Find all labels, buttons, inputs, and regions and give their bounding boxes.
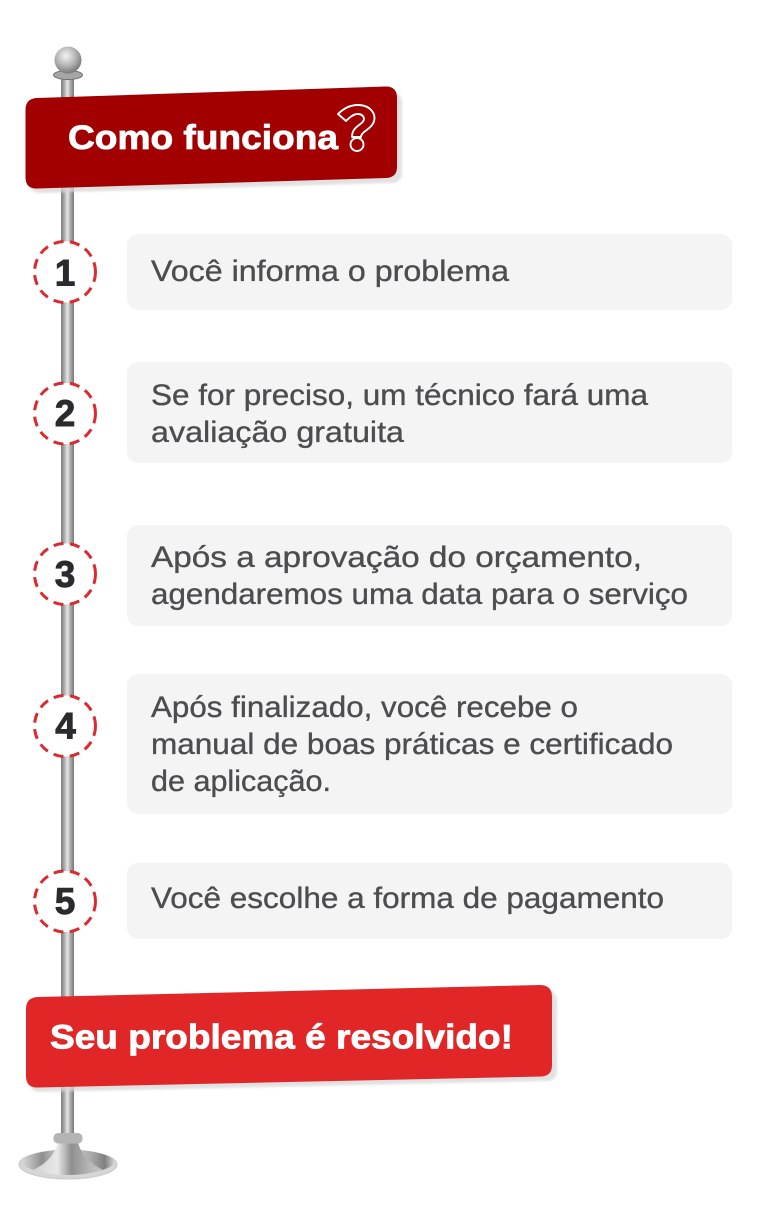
text 2: Se for preciso, um técnico fará uma — [151, 379, 648, 412]
text 4 — [151, 691, 673, 798]
badge 1: 1 — [55, 252, 75, 294]
badge 4 — [34, 696, 96, 756]
text 2 — [151, 379, 648, 449]
step 2 — [34, 362, 732, 463]
icon: question mark — [338, 105, 374, 151]
text 4: manual de boas práticas e certificado — [151, 728, 673, 761]
badge 2: 2 — [55, 393, 75, 434]
step 4 — [34, 674, 732, 814]
text 2: avaliação gratuita — [151, 416, 404, 449]
step 3 — [34, 525, 732, 626]
step 1 — [34, 234, 732, 310]
closing message: Seu problema é resolvido! — [50, 1018, 513, 1056]
text 5: Você escolhe a forma de pagamento — [151, 882, 664, 915]
banner: Como funciona — [26, 86, 402, 193]
pole — [19, 46, 117, 1179]
text 3 — [151, 541, 688, 611]
pole top ball — [54, 46, 82, 88]
badge 5: 5 — [55, 881, 75, 922]
pole shaft — [61, 78, 74, 1138]
badge 5 — [34, 871, 96, 932]
badge 3 — [34, 544, 96, 604]
pole base — [19, 1133, 117, 1179]
badge 2 — [34, 383, 96, 444]
panel 4 — [127, 674, 732, 814]
text 3: Após a aprovação do orçamento, — [151, 541, 642, 574]
text 3: agendaremos uma data para o serviço — [151, 578, 688, 611]
badge 1 — [34, 242, 96, 302]
panel 1 — [127, 234, 732, 310]
panel 2 — [127, 362, 732, 463]
badge 4: 4 — [55, 706, 76, 746]
text 1: Você informa o problema — [151, 255, 509, 288]
text 4: Após finalizado, você recebe o — [151, 691, 578, 724]
panel 3 — [127, 525, 732, 626]
badge 3: 3 — [55, 554, 75, 595]
text 4: de aplicação. — [151, 765, 331, 798]
heading: Como funciona — [68, 119, 339, 157]
banner: Seu problema é resolvido — [26, 985, 557, 1092]
panel 5 — [127, 863, 732, 939]
step 5 — [34, 863, 732, 939]
